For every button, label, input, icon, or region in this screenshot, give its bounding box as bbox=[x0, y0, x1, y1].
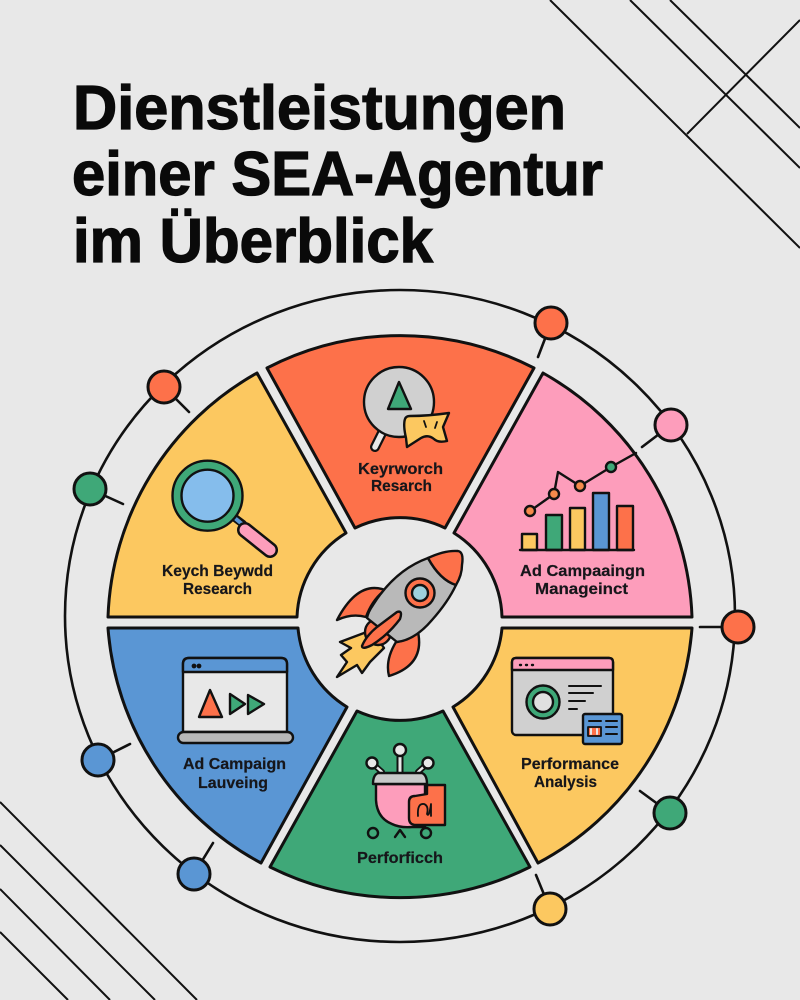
node: bottom blue bbox=[178, 858, 210, 890]
node: top red bbox=[535, 307, 567, 339]
label bbox=[183, 756, 286, 792]
rocket engine bbox=[365, 619, 391, 645]
node: left blue bbox=[82, 744, 114, 776]
segment shape bbox=[267, 336, 534, 528]
panel: green performance bbox=[270, 711, 530, 898]
rocket flame bbox=[337, 630, 384, 677]
node: pink bbox=[655, 409, 687, 441]
icon: analytics window bbox=[512, 658, 622, 744]
node: left green bbox=[74, 473, 106, 505]
icon: magnifier bbox=[172, 461, 270, 550]
label: Keych Beywdd bbox=[162, 563, 273, 580]
panel: red keyword research bbox=[267, 336, 534, 528]
rocket body bbox=[367, 558, 456, 642]
label: Perforficch bbox=[357, 850, 443, 867]
icon: bar chart with trend line bbox=[520, 453, 636, 550]
node: right red bbox=[722, 611, 754, 643]
icon: central rocket bbox=[337, 551, 462, 677]
icon: pot with pins and card bbox=[366, 744, 445, 838]
title bbox=[72, 74, 603, 276]
label: Ad Campaaingn bbox=[520, 563, 645, 580]
label bbox=[162, 563, 273, 598]
rocket left fin bbox=[337, 588, 385, 620]
segment shape bbox=[108, 628, 347, 863]
label: Manageinct bbox=[535, 581, 628, 598]
segment shape bbox=[454, 373, 692, 617]
rocket right fin bbox=[388, 632, 419, 676]
icon: search with speech bubble bbox=[364, 367, 449, 447]
panel: yellow keyword research bbox=[108, 373, 346, 617]
label: Lauveing bbox=[198, 775, 268, 792]
label: Resarch bbox=[371, 478, 432, 495]
title: Dienstleistungen bbox=[73, 74, 566, 143]
panel: pink ad campaign management bbox=[454, 373, 692, 617]
node: right green bbox=[654, 797, 686, 829]
label: Ad Campaign bbox=[183, 756, 286, 773]
segment shape bbox=[270, 711, 530, 898]
panel: blue ad campaign launch bbox=[108, 628, 347, 863]
rocket nose bbox=[428, 551, 462, 585]
label: Research bbox=[183, 581, 252, 598]
label: Keyrworch bbox=[358, 461, 443, 478]
segment shape bbox=[453, 628, 692, 863]
label: Analysis bbox=[534, 774, 597, 791]
label bbox=[520, 563, 645, 598]
outer ring with nodes bbox=[65, 290, 754, 942]
rocket window bbox=[406, 578, 434, 608]
label bbox=[521, 756, 619, 791]
title: einer SEA-Agentur bbox=[72, 140, 603, 209]
panel: yellow performance analysis bbox=[453, 628, 692, 863]
node: upper-left red bbox=[148, 371, 180, 403]
title: im Überblick bbox=[73, 207, 433, 276]
icon: laptop with play arrows bbox=[178, 658, 293, 743]
label bbox=[358, 461, 443, 495]
rocket centre fin bbox=[362, 612, 401, 648]
label: Performance bbox=[521, 756, 619, 773]
segment shape bbox=[108, 373, 346, 617]
node: bottom yellow bbox=[534, 893, 566, 925]
